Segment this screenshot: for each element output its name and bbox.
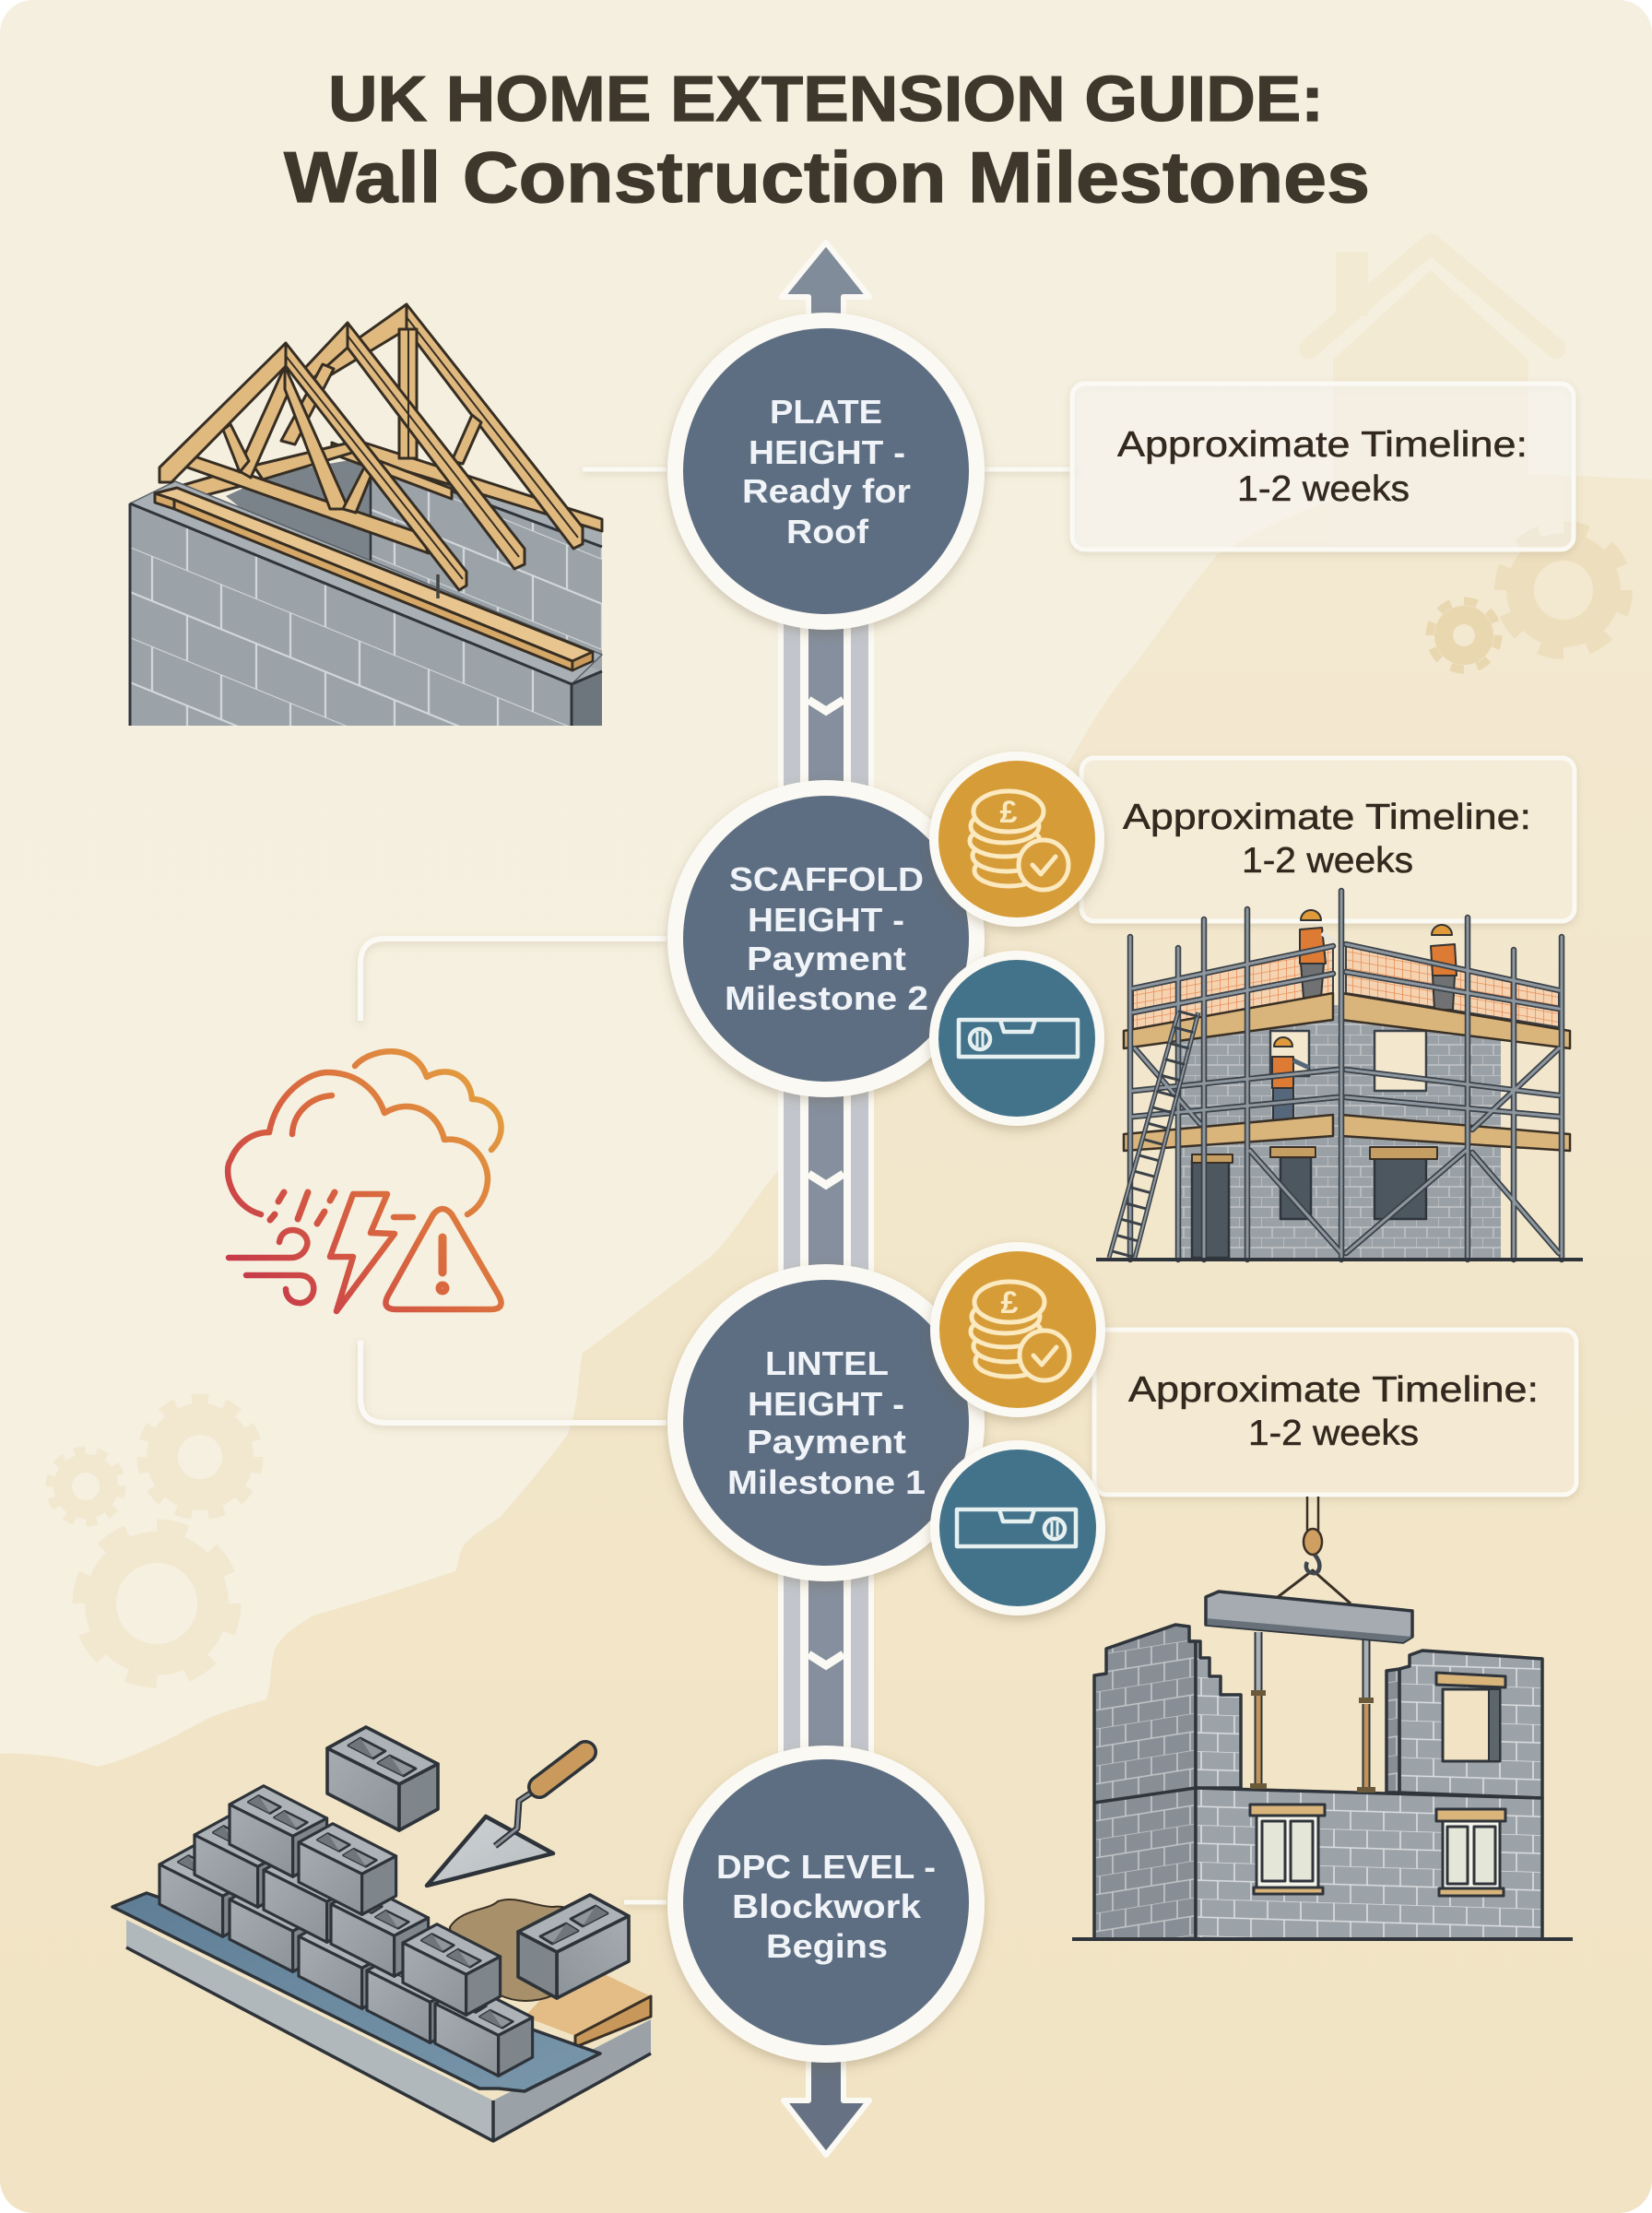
box 1 text: 1-2 weeks	[1237, 469, 1410, 509]
loose block top	[327, 1727, 438, 1830]
scaffold height label: Payment	[747, 940, 906, 977]
concrete lintel beam	[1206, 1592, 1412, 1642]
timeline box 2	[1081, 758, 1575, 921]
title	[284, 63, 1370, 218]
scaffold workers	[1272, 910, 1457, 1120]
title line 2: Wall Construction Milestones	[284, 136, 1370, 218]
soil strip	[525, 1961, 651, 2036]
box 1 text: Approximate Timeline:	[1117, 425, 1528, 465]
DPC level label: Blockwork	[732, 1888, 922, 1925]
left side wall	[1094, 1625, 1196, 1939]
icon: payment coins 1	[930, 1242, 1105, 1417]
plate height label: PLATE	[770, 393, 882, 431]
lower front wall	[1196, 1788, 1542, 1939]
crane hook and slings	[1278, 1497, 1351, 1604]
milestone: lintel height	[667, 1264, 985, 1581]
milestone: scaffold height	[667, 780, 985, 1097]
DPC membrane	[112, 1893, 600, 2091]
illustration: DPC level blockwork	[112, 1727, 651, 2141]
lower windows	[1250, 1805, 1505, 1896]
illustration: roof trusses on wall	[130, 304, 602, 726]
DPC level label	[716, 1848, 936, 1965]
lintel height label: HEIGHT -	[748, 1385, 904, 1423]
lintel height label: Payment	[747, 1423, 906, 1461]
title line 1: UK HOME EXTENSION GUIDE:	[328, 63, 1324, 135]
DPC level label: DPC LEVEL -	[716, 1848, 936, 1886]
lintel height label: Milestone 1	[727, 1463, 926, 1501]
scaffold safety netting	[1133, 944, 1559, 1031]
icon: spirit level 2	[929, 951, 1104, 1126]
scaffold ground line	[1096, 1258, 1583, 1261]
lintel height label: LINTEL	[765, 1344, 889, 1382]
scaffold height label: Milestone 2	[725, 979, 928, 1017]
icon: spirit level 1	[930, 1440, 1105, 1615]
scaffold height label: SCAFFOLD	[729, 860, 924, 898]
box 2 text: 1-2 weeks	[1242, 841, 1413, 881]
watermark: gears left	[50, 1400, 257, 1681]
central timeline rail	[778, 609, 874, 1770]
lintel height label	[727, 1344, 926, 1501]
foundation	[126, 1920, 493, 2141]
upper window opening	[1443, 1689, 1500, 1761]
box 3 text	[1128, 1370, 1539, 1453]
blockwork courses	[159, 1786, 533, 2076]
icon: storm weather warning	[228, 1051, 502, 1311]
plate height label: Ready for	[742, 472, 911, 510]
arrow up	[782, 243, 869, 318]
scaffold ladder	[1109, 1012, 1198, 1258]
scaffold decks	[1124, 993, 1570, 1151]
box 1 text	[1117, 425, 1528, 509]
box 2 text	[1123, 798, 1531, 881]
box 3 text: Approximate Timeline:	[1128, 1370, 1539, 1410]
chevrons on rail	[808, 700, 844, 1665]
DPC level label: Begins	[766, 1927, 888, 1965]
scaffold height label: HEIGHT -	[748, 901, 904, 939]
connector lines	[360, 469, 1074, 1902]
scaffold height label	[725, 860, 928, 1017]
watermark: gears right	[1430, 527, 1626, 669]
arrow down	[784, 2056, 869, 2155]
plate height label: HEIGHT -	[749, 433, 905, 471]
stepped return	[1189, 1641, 1241, 1788]
milestone: plate height	[667, 313, 985, 630]
watermark: house	[1309, 243, 1556, 553]
right upper wall	[1399, 1651, 1542, 1798]
milestone: DPC level	[667, 1746, 985, 2063]
trowel	[427, 1752, 585, 1886]
timeline box 1	[1072, 384, 1574, 550]
mortar pile	[450, 1899, 590, 2001]
icon: payment coins 2	[929, 751, 1104, 927]
acrow props	[1250, 1632, 1375, 1790]
scaffold tubes	[1130, 891, 1562, 1260]
plate height label	[742, 393, 911, 550]
plate height label: Roof	[786, 513, 869, 550]
loose block right	[518, 1895, 629, 1998]
lintel ground line	[1072, 1937, 1573, 1941]
illustration: lintel being lifted	[1072, 1497, 1573, 1939]
timeline box 3	[1094, 1330, 1576, 1495]
illustration: scaffold around blockwork	[1096, 891, 1583, 1260]
box 3 text: 1-2 weeks	[1248, 1414, 1419, 1453]
box 2 text: Approximate Timeline:	[1123, 798, 1531, 837]
